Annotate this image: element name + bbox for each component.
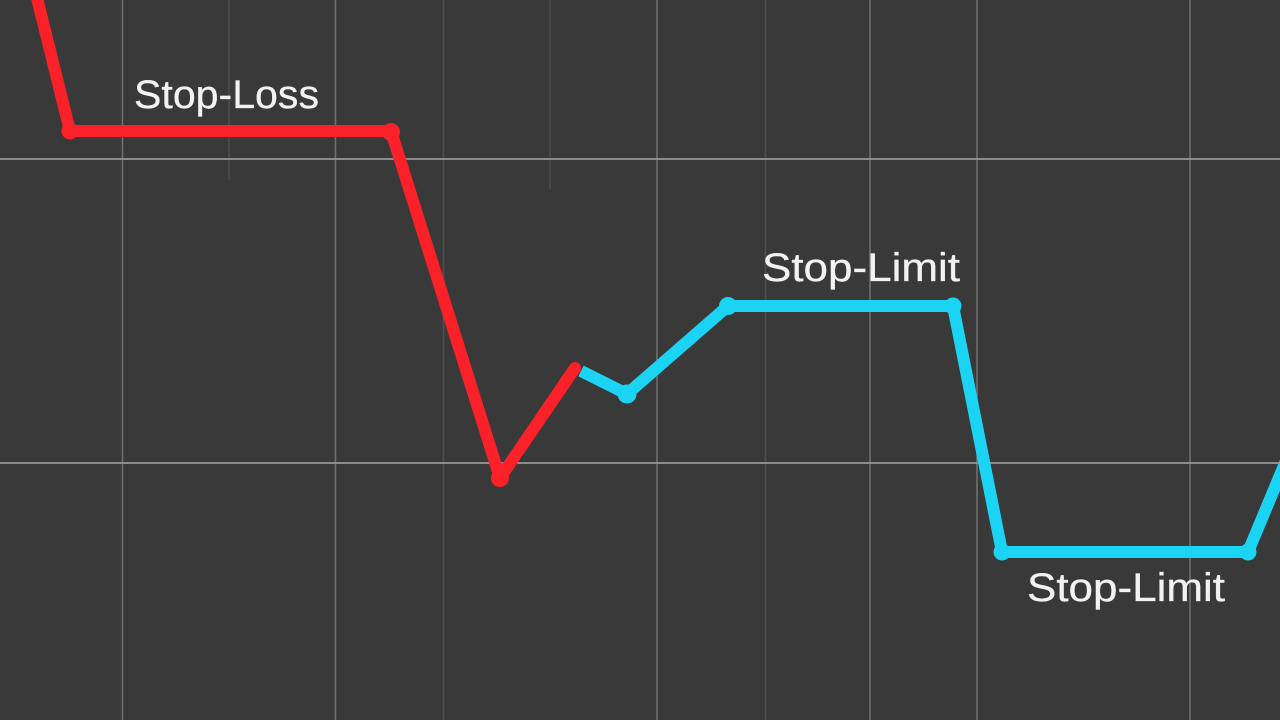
label: Stop-Loss: Stop-Loss	[134, 73, 319, 117]
label: Stop-Limit lower: Stop-Limit	[1027, 566, 1225, 610]
blue stop-limit line	[581, 297, 1280, 560]
label: Stop-Limit upper: Stop-Limit	[762, 246, 960, 290]
red stop-loss line	[36, 0, 575, 487]
